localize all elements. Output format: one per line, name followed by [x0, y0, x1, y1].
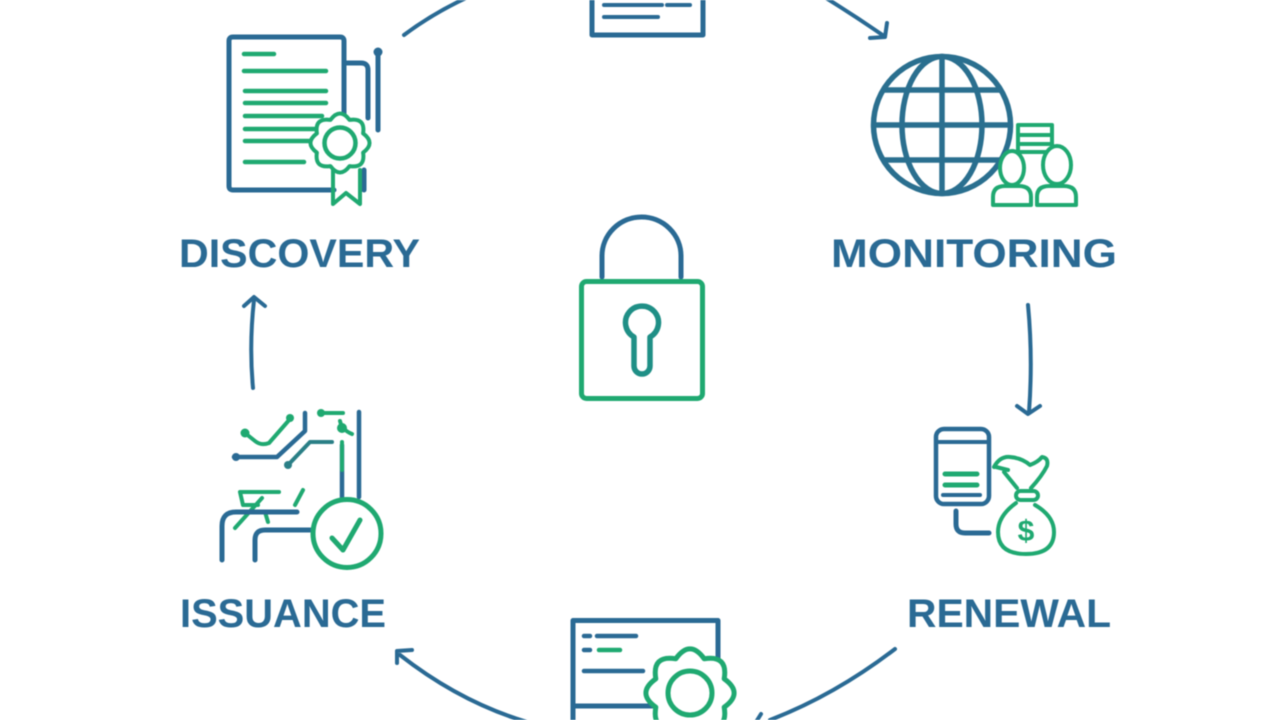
- icon: money bag: $: [1018, 515, 1035, 548]
- label: issuance: ISSUANCE: [180, 592, 386, 636]
- icon: ribbon seal: [310, 113, 370, 204]
- arrow: issuance to discovery: [244, 297, 265, 388]
- icon: renewal device and money bag: [936, 429, 1054, 554]
- arrow: bottom certificate to issuance: [397, 650, 527, 720]
- icon: globe: [874, 56, 1010, 194]
- arrow: renewal to bottom certificate: [756, 649, 895, 720]
- icon: top certificate: [592, 0, 703, 35]
- icon: issuance circuit with check: [222, 409, 381, 568]
- icon: bottom certificate with gear: [573, 620, 734, 720]
- label: discovery: DISCOVERY: [179, 232, 420, 276]
- label: monitoring: MONITORING: [831, 232, 1117, 276]
- label: renewal: RENEWAL: [907, 592, 1111, 636]
- icon: users and database: [993, 125, 1076, 205]
- arrow: top certificate to monitoring: [826, 0, 887, 38]
- icon: central padlock: [582, 217, 702, 398]
- icon: monitoring globe with users: [874, 56, 1076, 205]
- arrow: monitoring to renewal: [1017, 305, 1040, 414]
- icon: discovery document with seal: [229, 37, 382, 204]
- arrow: discovery to top certificate: [404, 0, 466, 35]
- icon: gear: [646, 649, 734, 720]
